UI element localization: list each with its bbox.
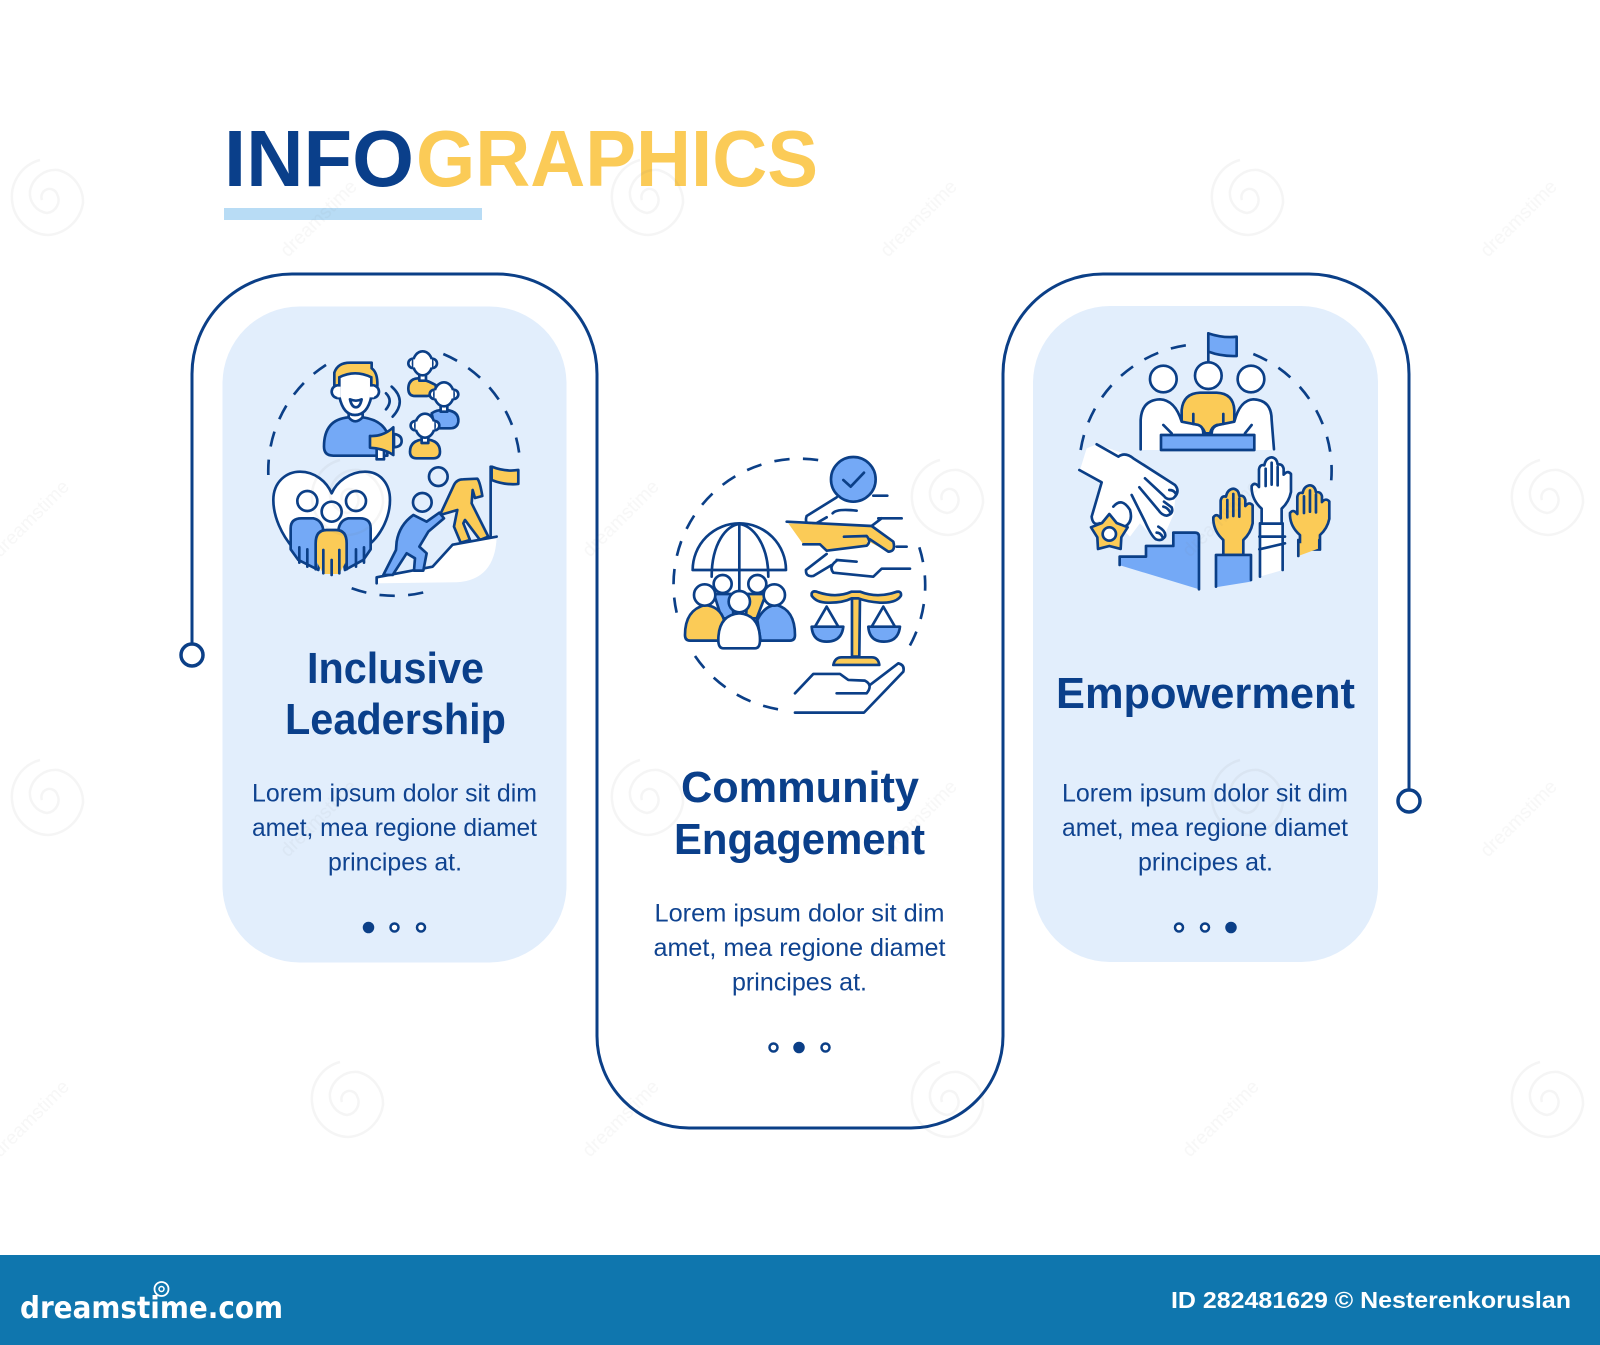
text: inclusive leadership description: Lorem ipsum dolor sit dim: [252, 780, 537, 808]
connecting frame outline: [192, 274, 1409, 1128]
heading: empowerment: Empowerment: [1056, 669, 1355, 718]
watermark pattern: dreamstime: [277, 777, 362, 862]
watermark pattern: dreamstime: [579, 477, 664, 562]
heading: inclusive leadership: Inclusive: [307, 644, 484, 693]
text: community engagement description: principes at.: [732, 968, 867, 996]
watermark pattern: [0, 160, 1583, 1162]
text: inclusive leadership description: principes at.: [328, 848, 462, 876]
pagination dots: step two: [770, 1043, 830, 1052]
watermark pattern: dreamstime: [579, 1077, 664, 1162]
text: community engagement description: [654, 900, 946, 996]
footer band: [0, 1255, 1600, 1345]
icon: community engagement: [674, 457, 925, 713]
text: empowerment description: principes at.: [1138, 848, 1273, 876]
text: inclusive leadership description: [252, 780, 537, 876]
icon: inclusive leadership: [268, 351, 519, 596]
pagination dots: step one: [364, 923, 425, 932]
frame start marker: [181, 644, 203, 666]
heading: community engagement: Community: [681, 763, 920, 812]
panel: inclusive leadership background: [222, 306, 566, 962]
watermark pattern: dreamstime: [1179, 477, 1264, 562]
watermark pattern: dreamstime: [877, 177, 962, 262]
text: inclusive leadership description: amet, mea regione diamet: [252, 814, 537, 842]
text: community engagement description: amet, mea regione diamet: [654, 934, 946, 962]
frame end marker: [1398, 790, 1420, 812]
text: empowerment description: amet, mea regione diamet: [1062, 814, 1348, 842]
text: empowerment description: Lorem ipsum dolor sit dim: [1062, 780, 1348, 808]
heading: community engagement: [674, 763, 925, 864]
heading: inclusive leadership: Leadership: [285, 695, 506, 744]
heading: community engagement: Engagement: [674, 815, 925, 864]
text: community engagement description: Lorem ipsum dolor sit dim: [654, 900, 944, 928]
watermark pattern: dreamstime: [1477, 177, 1562, 262]
panel: empowerment background: [1033, 306, 1378, 962]
watermark pattern: dreamstime: [1179, 1077, 1264, 1162]
heading: inclusive leadership: [285, 644, 506, 744]
title: GRAPHICS: [416, 114, 818, 203]
watermark pattern: dreamstime: [277, 177, 362, 262]
title underline: [224, 208, 482, 220]
footer credit: ID 282481629 © Nesterenkoruslan: [1171, 1287, 1571, 1313]
watermark pattern: dreamstime: [1477, 777, 1562, 862]
title: INFO: [224, 114, 414, 203]
icon: empowerment: [1079, 333, 1332, 589]
text: empowerment description: [1062, 780, 1348, 876]
watermark pattern: dreamstime: [877, 777, 962, 862]
pagination dots: step three: [1175, 923, 1236, 932]
title: [224, 114, 818, 203]
footer logo: dreamstime.com: [20, 1291, 283, 1326]
